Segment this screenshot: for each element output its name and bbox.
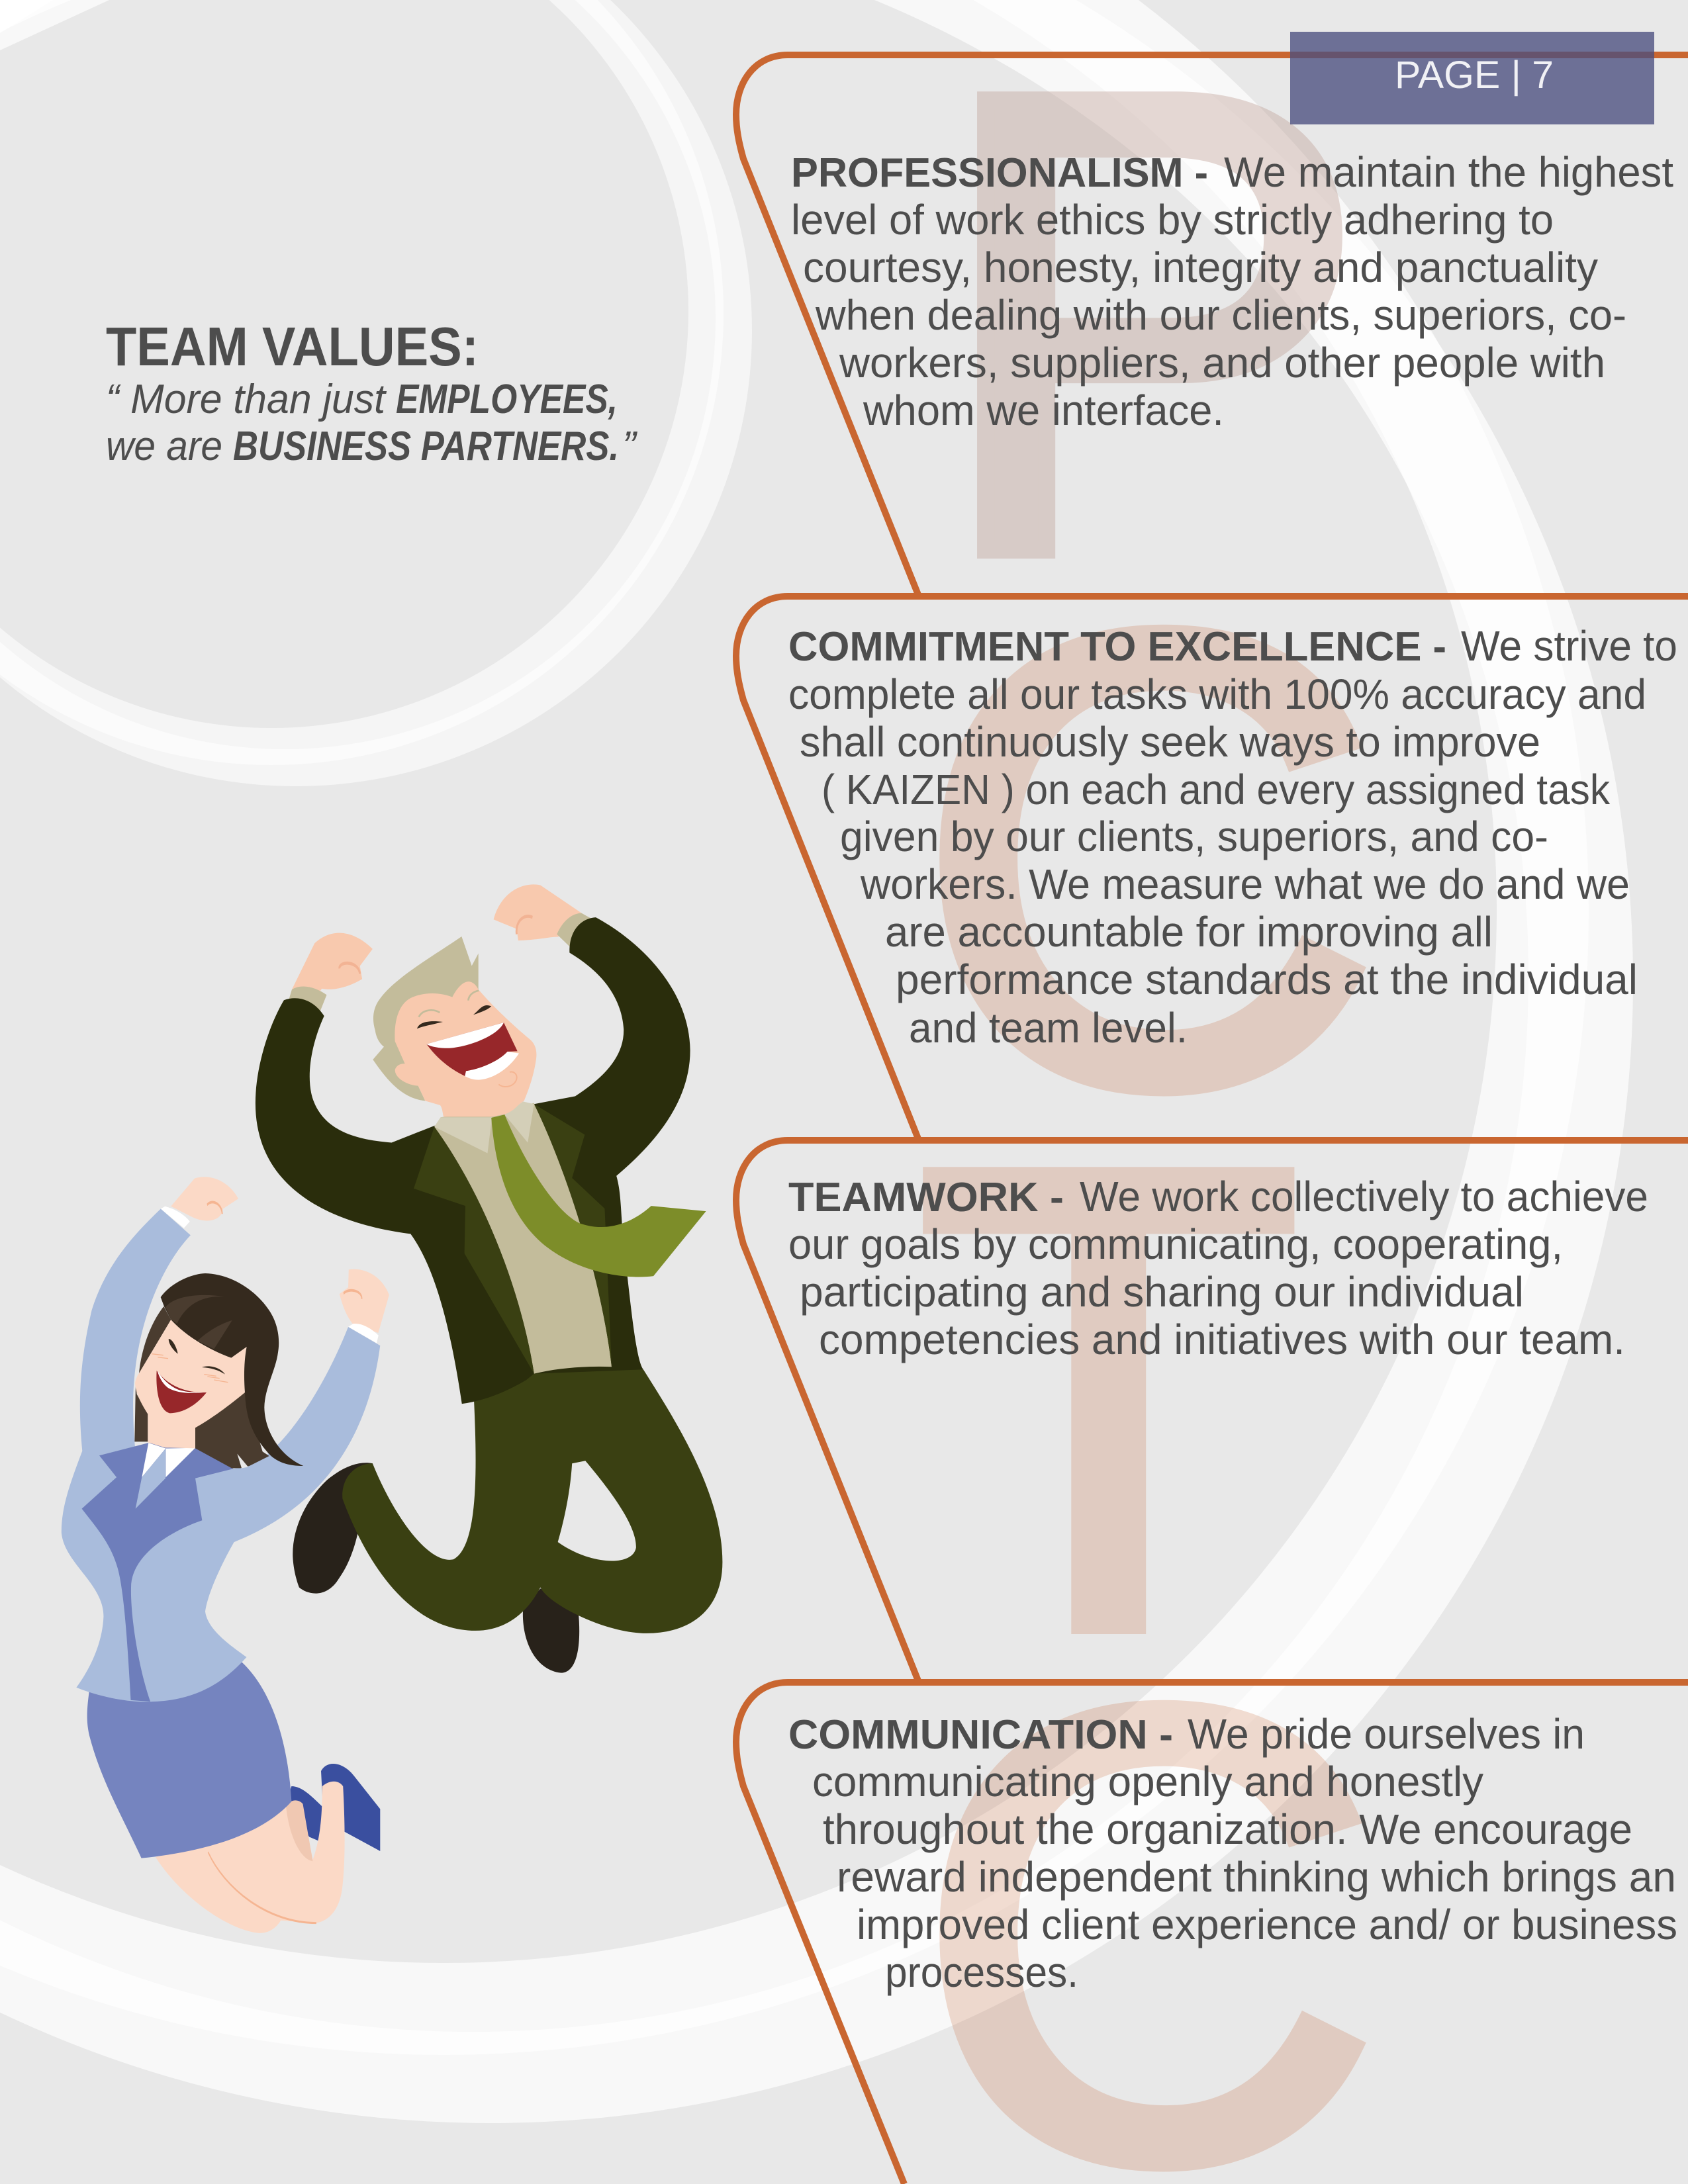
panel text: commitment to excellence: and team level.	[909, 1004, 1188, 1052]
panel text: teamwork: TEAMWORK -	[788, 1175, 1064, 1220]
woman blouse	[136, 1443, 195, 1509]
page number badge: PAGE | 7	[1395, 54, 1554, 97]
woman legs	[156, 1782, 345, 1933]
woman face	[135, 1320, 247, 1448]
watermark letter C: C	[915, 500, 1380, 1218]
title block: team values: “ More than just	[106, 377, 387, 422]
man hair	[373, 936, 479, 1101]
panel text: commitment to excellence: complete all our tasks with 100% accuracy and	[788, 670, 1646, 718]
panel text: commitment to excellence: COMMITMENT TO EXCELLENCE -	[788, 624, 1446, 670]
panel text: professionalism: level of work ethics by strictly adhering to	[791, 196, 1554, 244]
panel text: commitment to excellence: shall continuously seek ways to improve	[800, 718, 1540, 766]
man eyes and brows	[417, 991, 491, 1028]
title block: team values	[106, 316, 637, 469]
panel text: commitment to excellence: performance standards at the individual	[896, 956, 1638, 1003]
title block: team values: ”	[622, 424, 637, 469]
man mouth	[426, 1023, 519, 1087]
panel text: professionalism: when dealing with our clients, superiors, co-	[815, 291, 1626, 339]
panel text: professionalism: whom we interface.	[863, 387, 1224, 434]
panel text: communication: We pride ourselves in	[1188, 1710, 1585, 1758]
panel text: teamwork: competencies and initiatives with our team.	[819, 1316, 1625, 1363]
woman hands	[161, 1177, 389, 1343]
man hands	[289, 884, 596, 1011]
man trousers	[342, 1367, 722, 1633]
woman mouth	[156, 1371, 207, 1413]
hair highlights	[165, 1295, 232, 1349]
panel text: communication: communicating openly and honestly	[812, 1758, 1483, 1805]
panel text: commitment to excellence: are accountable for improving all	[885, 908, 1493, 956]
panel text: communication: COMMUNICATION -	[788, 1712, 1173, 1758]
panel text: professionalism	[791, 148, 1673, 434]
man jacket	[256, 917, 690, 1404]
title block: team values: EMPLOYEES,	[396, 377, 618, 422]
woman eyes and cheeks	[152, 1339, 228, 1383]
illustration: woman head	[134, 1273, 303, 1468]
man lapels	[414, 1104, 612, 1374]
panel text: commitment to excellence: We strive to	[1461, 622, 1677, 670]
man shoes	[293, 1463, 579, 1673]
woman front hair	[161, 1273, 303, 1466]
watermark letter T: T	[917, 1034, 1301, 1764]
man collar	[434, 1101, 534, 1153]
man tie	[491, 1115, 706, 1277]
panel text: commitment to excellence: workers. We measure what we do and we	[860, 860, 1630, 908]
hair gap	[237, 1454, 248, 1468]
panel text: professionalism: courtesy, honesty, integrity and panctuality	[803, 244, 1598, 291]
title block: team values: BUSINESS PARTNERS.	[233, 424, 619, 469]
panel text: communication: reward independent thinking which brings an	[837, 1853, 1676, 1901]
title block: team values: we are	[106, 424, 222, 469]
woman shoes	[285, 1764, 380, 1851]
man face	[395, 981, 536, 1116]
man shirt	[434, 1103, 612, 1374]
panel text: communication: improved client experience and/ or business	[857, 1901, 1677, 1948]
panel text: teamwork: We work collectively to achieve	[1080, 1173, 1648, 1220]
orange outlines for value panels	[736, 55, 1688, 2184]
panel text: commitment to excellence	[788, 622, 1677, 1052]
panel text: teamwork: participating and sharing our individual	[800, 1268, 1524, 1316]
title block: team values: TEAM VALUES:	[106, 316, 479, 377]
illustration: jumping man body	[256, 884, 722, 1673]
panel text: commitment to excellence: ( KAIZEN ) on each and every assigned task	[821, 766, 1611, 813]
panel text: professionalism: PROFESSIONALISM -	[791, 150, 1208, 196]
panel text: professionalism: We maintain the highest	[1224, 148, 1673, 196]
woman back hair	[134, 1306, 269, 1468]
panel text: teamwork: our goals by communicating, cooperating,	[788, 1220, 1563, 1268]
panel text: communication: processes.	[885, 1948, 1078, 1996]
panel text: commitment to excellence: given by our clients, superiors, and co-	[840, 813, 1548, 860]
panel text: professionalism: workers, suppliers, and other people with	[839, 339, 1605, 387]
woman inner jacket	[82, 1443, 234, 1702]
woman skirt	[87, 1662, 291, 1858]
page number badge	[1290, 32, 1654, 124]
illustration: man head	[373, 936, 536, 1116]
panel text: communication: throughout the organization. We encourage	[823, 1805, 1632, 1853]
illustration: jumping woman body	[62, 1177, 389, 1933]
panel text: teamwork	[788, 1173, 1648, 1363]
panel text: communication	[788, 1710, 1677, 1996]
woman jacket and arms	[62, 1209, 380, 1702]
